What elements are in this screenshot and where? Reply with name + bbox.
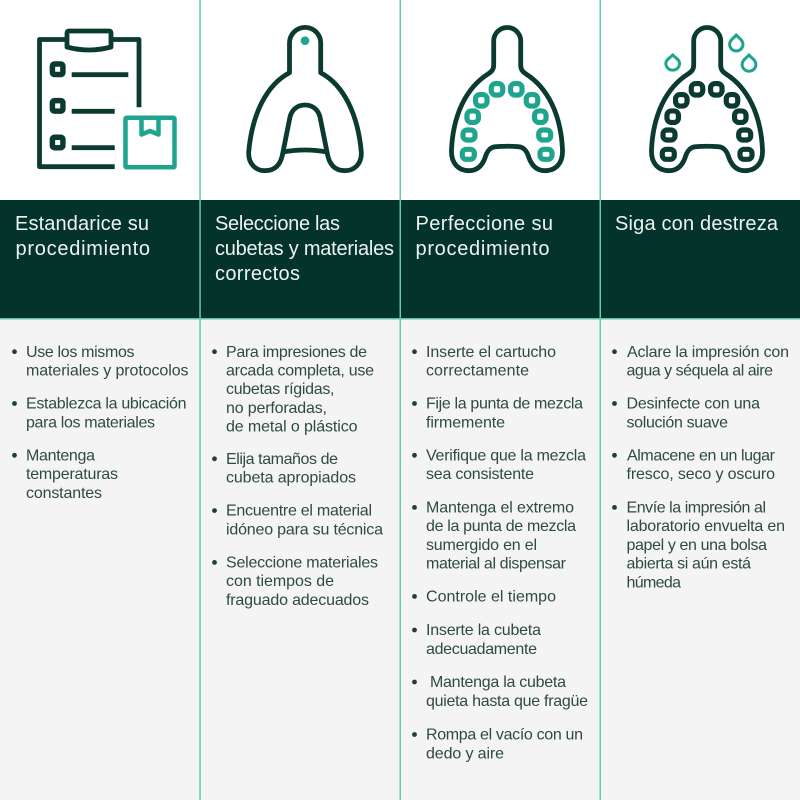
list item: no perforadas,	[226, 400, 327, 417]
list item: papel y en una bolsa	[626, 537, 767, 554]
list item: Inserte la cubeta	[426, 622, 541, 639]
list item: materiales y protocolos	[26, 362, 188, 380]
list item	[12, 396, 186, 431]
list item	[412, 500, 576, 573]
list item: Controle el tiempo	[426, 588, 556, 606]
list item: firmemente	[426, 414, 505, 431]
list item: para los materiales	[26, 414, 155, 431]
list item: fresco, seco y oscuro	[626, 466, 775, 483]
list item: Aclare la impresión con	[627, 344, 789, 361]
list item: Para impresiones de	[226, 344, 367, 361]
list item: abierta si aún está	[626, 556, 751, 573]
list item: laboratorio envuelta en	[626, 518, 785, 535]
list item: Envíe la impresión al	[626, 500, 766, 516]
list: column 3	[412, 344, 588, 762]
list item: dedo y aire	[426, 745, 504, 762]
panel: column 4, follow up	[600, 28, 800, 800]
list item: Almacene en un lugar	[627, 447, 776, 464]
heading: column 2: Seleccione las	[215, 213, 340, 235]
heading: column 2: correctos	[215, 263, 300, 285]
list item: Use los mismos	[26, 344, 134, 361]
heading: column 3: Perfeccione su	[416, 213, 553, 235]
list item	[412, 344, 556, 380]
list item	[612, 396, 760, 431]
list item	[412, 727, 583, 762]
list item	[412, 674, 588, 710]
list item: con tiempos de	[226, 573, 334, 590]
list item: Fije la punta de mezcla	[426, 396, 583, 413]
panel: column 1, standardize	[0, 0, 200, 800]
list item: Mantenga el extremo	[426, 500, 574, 516]
list item	[212, 451, 356, 487]
list item: húmeda	[626, 574, 681, 591]
list item: Rompa el vacío con un	[426, 727, 583, 744]
icon: perforated impression tray	[249, 27, 361, 171]
list item	[412, 447, 586, 483]
heading: column 1: Estandarice su	[15, 213, 149, 235]
list item	[412, 622, 541, 658]
list item	[12, 447, 118, 502]
heading: column 2: cubetas y materiales	[215, 238, 394, 260]
list: column 4	[612, 344, 789, 591]
list item: cubetas rígidas,	[226, 381, 334, 398]
heading: column 1: procedimiento	[16, 238, 150, 260]
heading: column 3	[416, 213, 553, 260]
list item	[12, 344, 188, 380]
list item: Inserte el cartucho	[426, 344, 556, 361]
list item	[612, 500, 785, 591]
list item: idóneo para su técnica	[226, 521, 383, 538]
list item: cubeta apropiados	[226, 470, 356, 487]
list item: fraguado adecuados	[226, 592, 369, 609]
list item	[212, 554, 378, 609]
list item: quieta hasta que fragüe	[426, 693, 588, 710]
list item	[612, 447, 776, 483]
heading: column 2	[215, 213, 394, 285]
list item: material al dispensar	[426, 556, 567, 573]
list item: Elija tamaños de	[226, 451, 338, 468]
list item	[212, 344, 374, 436]
list item: sea consistente	[426, 466, 534, 483]
list item	[612, 344, 789, 380]
list item: Encuentre el material	[226, 503, 372, 520]
list item: Verifique que la mezcla	[426, 447, 586, 464]
list item: de metal o plástico	[226, 419, 358, 436]
list item: Mantenga	[26, 447, 95, 464]
list item: adecuadamente	[426, 641, 537, 658]
list: column 1	[12, 344, 188, 502]
list: column 2	[212, 344, 383, 609]
icon: tray with teal impression teeth	[451, 28, 563, 171]
list item: arcada completa, use	[226, 362, 374, 380]
list item: correctamente	[426, 362, 529, 380]
list item: Seleccione materiales	[226, 554, 378, 572]
list item: Desinfecte con una	[626, 396, 760, 413]
list item: de la punta de mezcla	[426, 518, 576, 535]
heading: column 4: Siga con destreza	[615, 213, 779, 235]
list item: Establezca la ubicación	[26, 396, 186, 413]
heading: column 3: procedimiento	[416, 238, 550, 260]
list item: agua y séquela al aire	[626, 362, 773, 380]
list item: temperaturas	[26, 466, 118, 483]
list item: sumergido en el	[426, 537, 537, 554]
list item: constantes	[26, 485, 102, 502]
heading: column 1	[15, 213, 150, 260]
panel: column 2, select	[200, 27, 400, 800]
list item	[212, 503, 383, 538]
list item: solución suave	[626, 414, 728, 431]
list item: Mantenga la cubeta	[430, 674, 566, 691]
list item	[412, 396, 583, 431]
panel: column 3, perfect	[400, 28, 600, 800]
icon: clipboard with box	[40, 31, 174, 167]
icon: tray with dark teeth and water drops	[651, 28, 763, 171]
